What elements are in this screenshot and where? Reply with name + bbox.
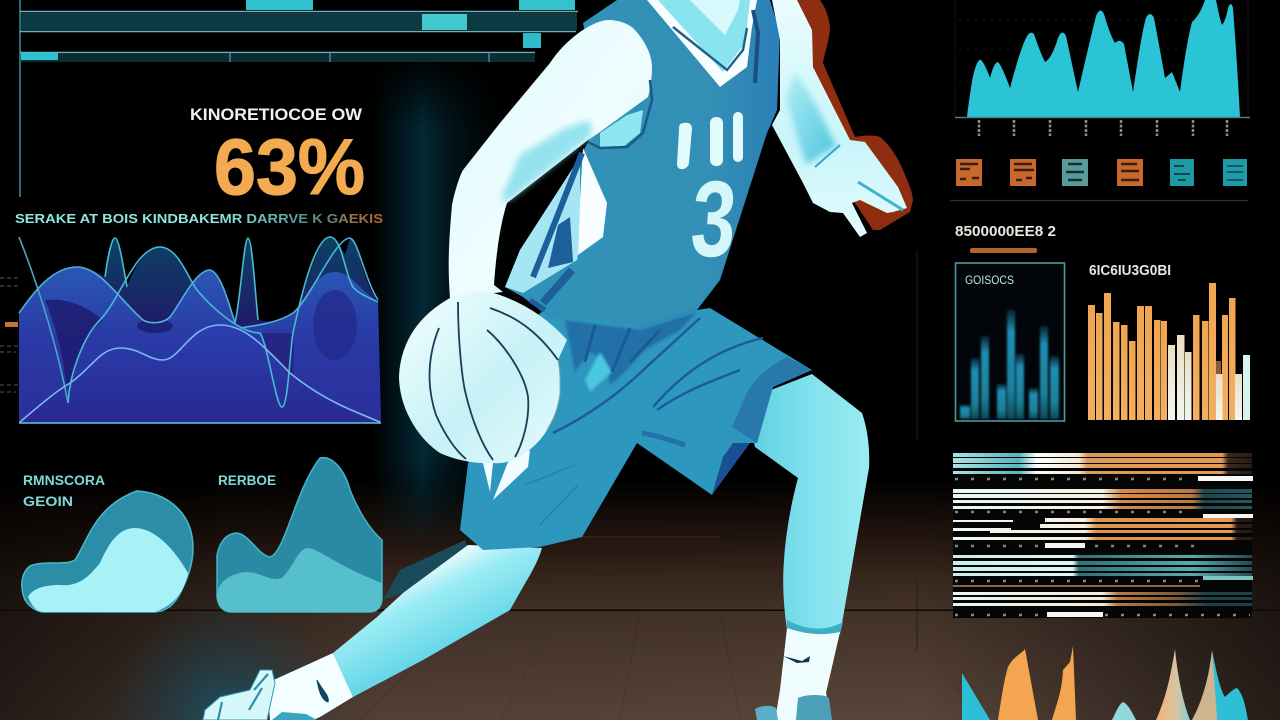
mini chart label: right: RERBOE [218,473,276,488]
section heading: 8500000EE8 2 [955,223,1056,240]
basketball [399,291,567,463]
sock logo [317,680,328,702]
stripe group 2 [953,489,1252,509]
jersey [505,0,780,327]
left margin ticks [0,278,20,392]
hill chart: left [22,491,193,612]
stat value: 63%: 63% [214,122,365,211]
stat heading: KINORETIOCOE OW [190,105,363,124]
jersey number marks [677,112,743,169]
player illustration [203,0,913,720]
chart caption: SERAKE AT BOIS KINDBAKEMR DARRVE K GAEKIS [15,211,383,226]
stripe group 1 [953,453,1252,474]
player front shoe [755,695,832,720]
player front leg [745,374,869,635]
player arm: far side [772,0,907,237]
mini chart label: left: RMNSCORA [23,473,105,488]
jersey number: 3 [687,160,740,280]
legend icon 2 [1010,159,1036,186]
legend icons row [956,159,1247,186]
legend icon 3 [1062,159,1088,186]
back sock [267,653,353,720]
line series [19,237,380,422]
arm shading [500,120,592,200]
shorts cuff [732,357,812,443]
legend icon 5 [1170,159,1194,186]
stripe group 3 [953,518,1252,540]
arm shadow: orange echo [790,0,913,230]
shorts side flap [493,450,530,500]
area: front series [20,325,380,422]
waist folds [565,312,697,385]
top-right area chart [955,0,1250,136]
bar chart label: 6IC6IU3G0BI [1089,263,1171,279]
area: dark back series [19,237,381,423]
panel: blue bar chart [956,263,1064,421]
stripe group 5 [953,592,1252,606]
area: mid blue series [19,267,381,423]
shorts [460,305,812,550]
legend icon 4 [1117,159,1143,186]
blue chart label: GOISOCS [965,275,1014,287]
panel: orange and cream bar chart [1088,283,1250,420]
panel: striped data table [953,453,1253,618]
stripe group 4 [953,555,1252,576]
player front sock [775,628,840,720]
mini chart sublabel: GEOIN [23,494,73,509]
blue bars [960,310,1059,419]
hill chart: right [217,458,382,612]
shorts inner shadow [712,443,750,495]
highlight cells [1045,476,1253,617]
section underline [970,248,1037,253]
layered area chart [19,237,381,423]
sock logo [783,656,810,663]
bottom-right peak chart [962,646,1248,720]
player back shoe [203,670,317,720]
player back leg [267,540,542,720]
legend icon 1 [956,159,982,186]
legend icon 6 [1223,159,1247,186]
top-left status bars panel [20,0,578,197]
player arm: ball side [449,20,652,298]
neck and collar [647,0,758,87]
